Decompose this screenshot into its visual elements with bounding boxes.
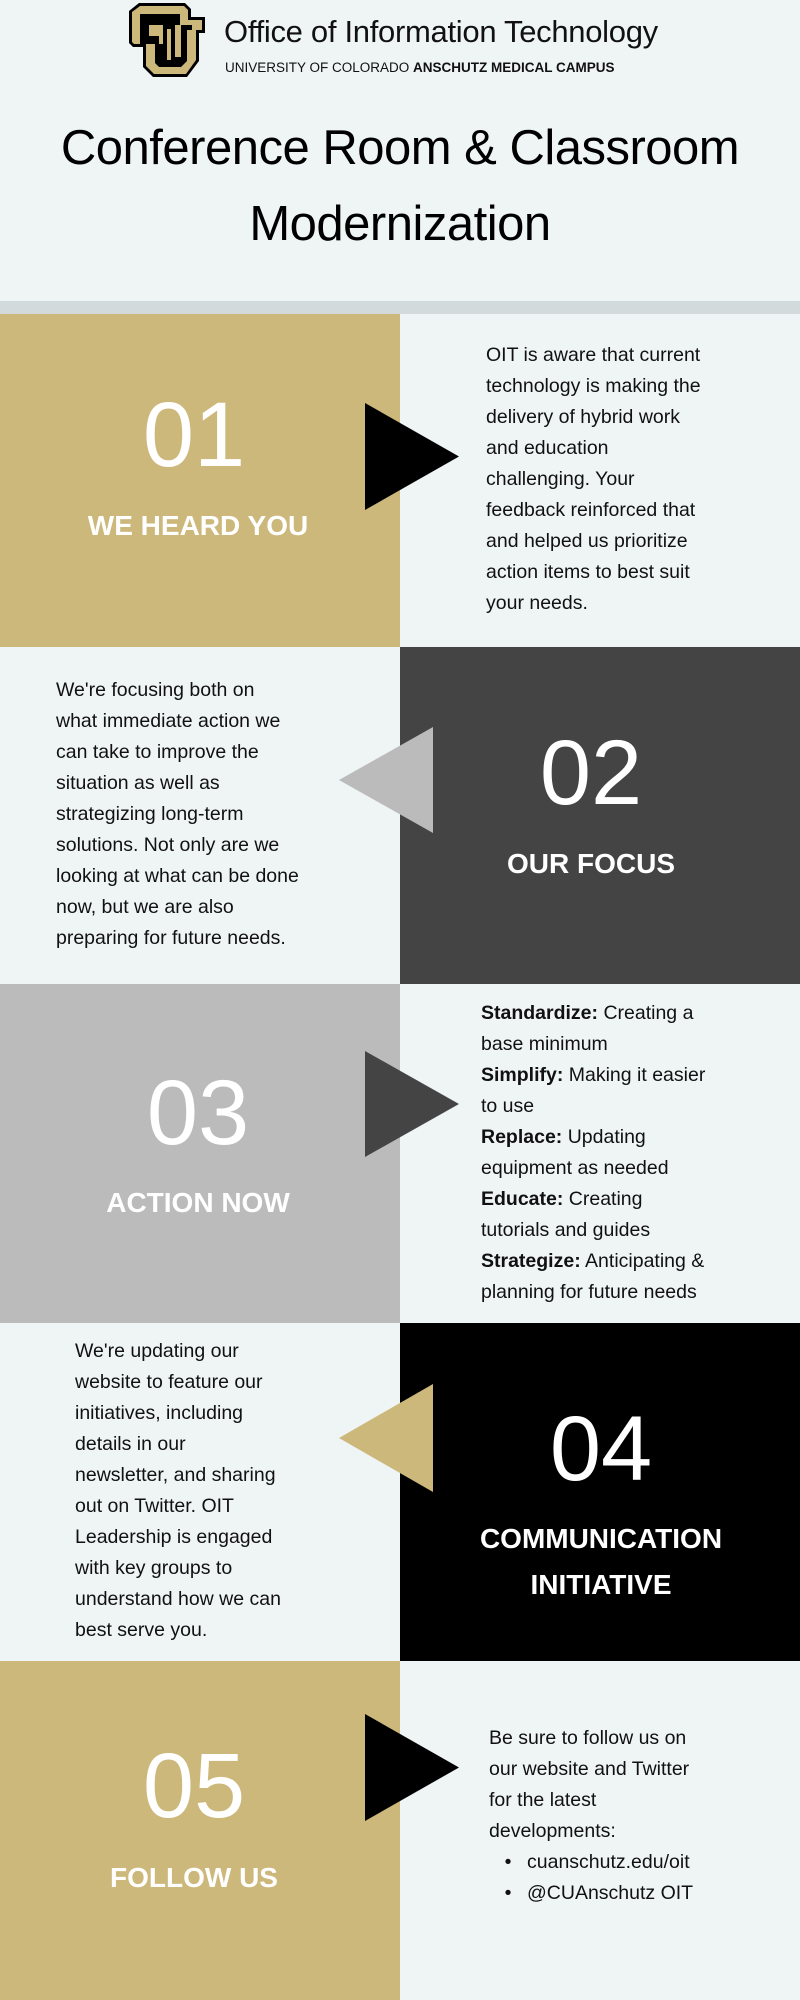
text block: delivery of hybrid work bbox=[486, 406, 680, 428]
text block with links: • bbox=[505, 1851, 511, 1873]
text block: now, but we are also bbox=[56, 896, 234, 918]
text block with links: cuanschutz.edu/oit bbox=[527, 1851, 690, 1873]
arrow right black bbox=[365, 1714, 459, 1821]
heading: communication initiative bbox=[480, 1523, 722, 1600]
text block: your needs. bbox=[486, 592, 588, 614]
header bbox=[61, 3, 739, 251]
heading: follow us: FOLLOW US bbox=[110, 1862, 278, 1893]
text block: with key groups to bbox=[75, 1557, 232, 1579]
text block: feedback reinforced that bbox=[486, 499, 695, 521]
heading: action now: ACTION NOW bbox=[106, 1187, 290, 1218]
text block with links: Be sure to follow us on bbox=[489, 1727, 686, 1749]
text block with links: @CUAnschutz OIT bbox=[527, 1882, 693, 1904]
arrow left gold bbox=[339, 1384, 433, 1492]
text block: action items to best suit bbox=[486, 561, 690, 583]
arrow right dark bbox=[365, 1051, 459, 1157]
action list: Simplify: Making it easier bbox=[481, 1064, 705, 1086]
text block: We're updating our bbox=[75, 1340, 239, 1362]
heading: we heard you: WE HEARD YOU bbox=[88, 510, 308, 541]
text block: OIT is aware that current bbox=[486, 344, 700, 366]
text block bbox=[56, 679, 299, 949]
panel: 04 communication initiative bbox=[75, 1323, 800, 1661]
action list: tutorials and guides bbox=[481, 1219, 650, 1241]
text block: and education bbox=[486, 437, 609, 459]
action list: planning for future needs bbox=[481, 1281, 697, 1303]
text block: best serve you. bbox=[75, 1619, 207, 1641]
action list bbox=[481, 1002, 706, 1303]
text block with links: for the latest bbox=[489, 1789, 596, 1811]
number 04: 04 bbox=[550, 1398, 652, 1500]
text block bbox=[75, 1340, 281, 1641]
text block: We're focusing both on bbox=[56, 679, 254, 701]
panel: 01 we heard you bbox=[0, 314, 701, 647]
number 01: 01 bbox=[143, 384, 245, 486]
text block: details in our bbox=[75, 1433, 186, 1455]
panel: 02 our focus bbox=[56, 647, 800, 984]
org name: Office of Information Technology bbox=[224, 14, 658, 49]
heading: our focus: OUR FOCUS bbox=[507, 848, 675, 879]
arrow right black bbox=[365, 403, 459, 510]
title bbox=[61, 121, 739, 251]
action list: base minimum bbox=[481, 1033, 608, 1055]
org subtitle: UNIVERSITY OF COLORADO ANSCHUTZ MEDICAL CAMPUS bbox=[225, 60, 615, 75]
text block: out on Twitter. OIT bbox=[75, 1495, 234, 1517]
action list: Educate: Creating bbox=[481, 1188, 642, 1210]
text block: and helped us prioritize bbox=[486, 530, 688, 552]
title: Modernization bbox=[249, 197, 551, 251]
text block: preparing for future needs. bbox=[56, 927, 286, 949]
number 03: 03 bbox=[147, 1062, 249, 1164]
action list: Strategize: Anticipating & bbox=[481, 1250, 704, 1272]
text block: situation as well as bbox=[56, 772, 220, 794]
text block with links: • bbox=[505, 1882, 511, 1904]
text block: challenging. Your bbox=[486, 468, 635, 490]
panel: 03 action now bbox=[0, 984, 706, 1323]
text block with links bbox=[489, 1727, 693, 1904]
panel: 05 follow us bbox=[0, 1661, 693, 2000]
heading: communication initiative: COMMUNICATION bbox=[480, 1523, 722, 1554]
action list: Replace: Updating bbox=[481, 1126, 646, 1148]
text block: website to feature our bbox=[75, 1371, 263, 1393]
text block with links: our website and Twitter bbox=[489, 1758, 689, 1780]
icon: CU logo bbox=[129, 3, 205, 77]
heading: communication initiative: INITIATIVE bbox=[530, 1569, 672, 1600]
action list: to use bbox=[481, 1095, 534, 1117]
text block with links: developments: bbox=[489, 1820, 616, 1842]
text block: Leadership is engaged bbox=[75, 1526, 272, 1548]
action list: Standardize: Creating a bbox=[481, 1002, 693, 1024]
text block: looking at what can be done bbox=[56, 865, 299, 887]
action list: equipment as needed bbox=[481, 1157, 669, 1179]
title: Conference Room & Classroom bbox=[61, 121, 739, 175]
text block: understand how we can bbox=[75, 1588, 281, 1610]
text block: technology is making the bbox=[486, 375, 701, 397]
text block: solutions. Not only are we bbox=[56, 834, 279, 856]
text block: can take to improve the bbox=[56, 741, 259, 763]
text block: what immediate action we bbox=[56, 710, 280, 732]
text block bbox=[486, 344, 701, 614]
arrow left gray bbox=[339, 727, 433, 833]
text block: newsletter, and sharing bbox=[75, 1464, 276, 1486]
text block: initiatives, including bbox=[75, 1402, 243, 1424]
number 02: 02 bbox=[540, 722, 642, 824]
number 05: 05 bbox=[143, 1735, 245, 1837]
text block: strategizing long-term bbox=[56, 803, 244, 825]
